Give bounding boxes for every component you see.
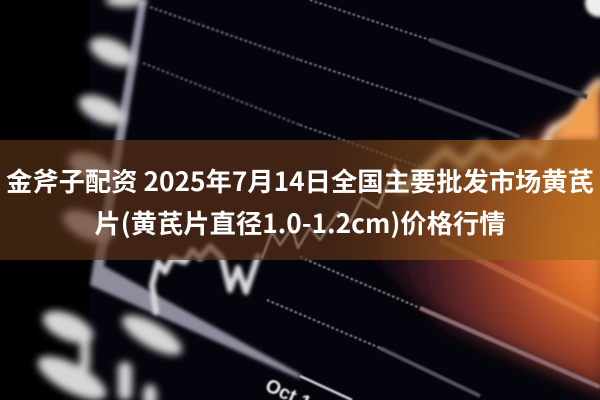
orange chart peak fill bbox=[550, 80, 600, 140]
title bbox=[6, 160, 594, 241]
title: 片(黄芪片直径1.0-1.2cm)价格行情 bbox=[95, 202, 505, 241]
title: 金斧子配资 2025年7月14日全国主要批发市场黄芪 bbox=[6, 160, 594, 199]
axis line bbox=[90, 0, 300, 379]
blurred tick labels bbox=[32, 0, 187, 400]
price line chart bbox=[152, 82, 600, 312]
orange glow bbox=[360, 90, 600, 395]
axis bottom extension bbox=[300, 376, 352, 400]
top right blob bbox=[585, 0, 600, 17]
dotted grid lines bbox=[143, 0, 600, 396]
title band bbox=[0, 140, 600, 260]
